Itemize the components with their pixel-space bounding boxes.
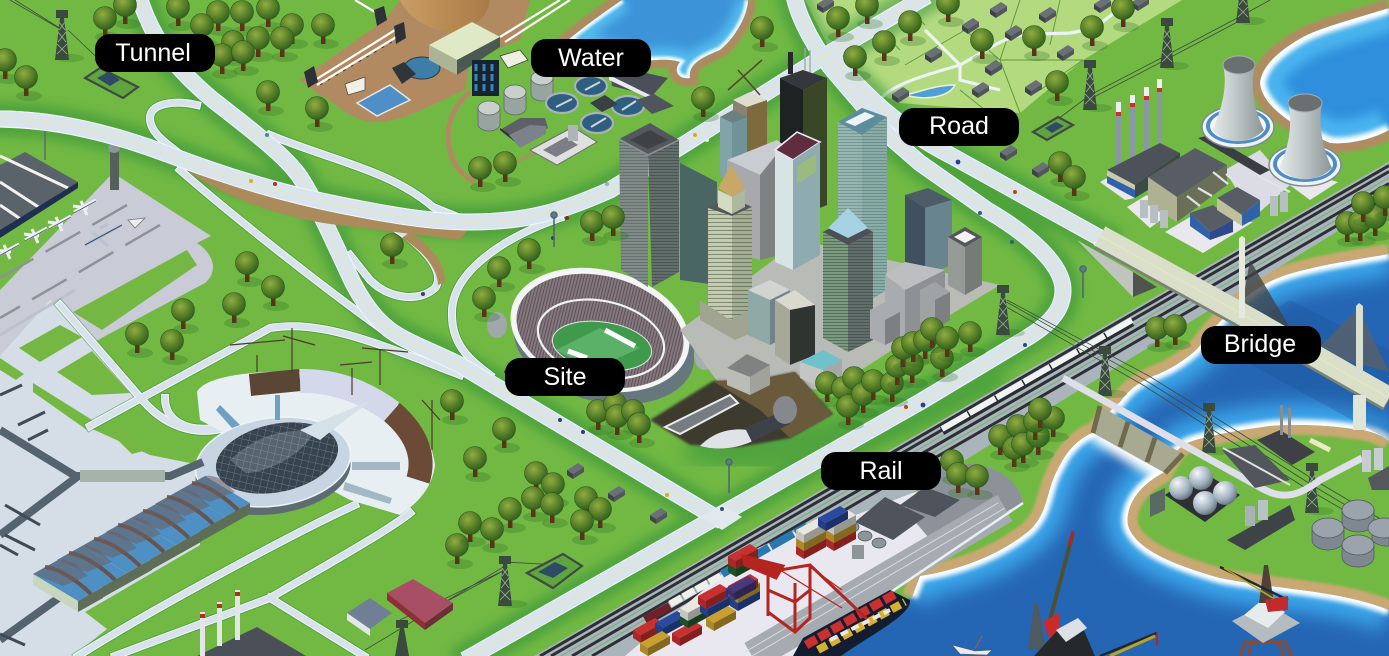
- terminal glass hall: [33, 476, 250, 612]
- clarifiers: [546, 76, 644, 133]
- skyscrapers: [619, 48, 982, 395]
- tunnel cutaway: [650, 372, 833, 448]
- freight train: [645, 526, 807, 620]
- port ground: [625, 464, 1023, 656]
- lake: top right: [1250, 0, 1389, 150]
- oil platform east: [1220, 565, 1300, 656]
- overpass support: [188, 172, 470, 240]
- label: Water: Water: [558, 44, 624, 72]
- station yards: [1100, 157, 1338, 253]
- stadium: [487, 250, 716, 423]
- label: Bridge: Bridge: [1224, 330, 1296, 358]
- airport terminal building: [0, 130, 120, 238]
- grass shading along roads: [0, 0, 1100, 656]
- blue stack tower: [472, 60, 499, 96]
- black tower: [780, 48, 827, 215]
- dark blue tower: [905, 188, 952, 275]
- lake: top centre: [550, 0, 750, 85]
- grey mid tower: [727, 140, 790, 260]
- wings: [352, 462, 400, 470]
- turbine hall: [1148, 148, 1227, 197]
- label: Tunnel: [95, 34, 215, 72]
- right low-rise: [885, 262, 945, 340]
- side cylinders: [487, 312, 507, 338]
- sand pile: [400, 0, 490, 32]
- airport green patches: [0, 325, 147, 454]
- brown tower: [728, 60, 767, 165]
- bridge: [1077, 236, 1389, 430]
- terminal concourses: [0, 385, 203, 645]
- label: Rail: [821, 452, 941, 490]
- annex buildings: [1190, 205, 1233, 232]
- mast: [44, 130, 46, 160]
- oil platform centre: [952, 531, 1157, 656]
- cooling towers: [1202, 56, 1341, 186]
- label: Rail: Rail: [859, 457, 903, 485]
- junction: [700, 505, 742, 530]
- containers: [633, 506, 856, 656]
- pylons: [1239, 236, 1245, 318]
- terminal roof: [190, 395, 400, 524]
- helicopter: [952, 645, 992, 655]
- large grey tower: [619, 123, 679, 287]
- power station: [1100, 79, 1338, 253]
- storage tanks: [478, 71, 553, 131]
- label: Site: Site: [543, 363, 587, 391]
- cable shadows: [1240, 260, 1290, 328]
- sea and river: [841, 243, 1389, 656]
- ship: [793, 590, 910, 656]
- railway corridor: [534, 162, 1389, 656]
- terminal site white ground: [197, 372, 435, 515]
- abutment: [1077, 240, 1133, 297]
- airport apron: [0, 173, 215, 656]
- roads: [0, 0, 1100, 656]
- stone block: [727, 354, 770, 395]
- label: Tunnel: Tunnel: [115, 39, 191, 67]
- mid low-rise: [748, 280, 790, 345]
- water treatment plant: [478, 71, 674, 165]
- grey box tower: [948, 227, 982, 295]
- control tower: [108, 143, 120, 190]
- dark teal building: [680, 163, 717, 285]
- east block: [1368, 466, 1389, 490]
- fuel tanks: [1140, 192, 1288, 228]
- oil tanks: [1312, 500, 1389, 567]
- warehouses: [855, 497, 925, 540]
- small buildings: [500, 118, 548, 142]
- city ground plate: [680, 240, 1000, 390]
- round thickener: [404, 57, 440, 79]
- smokestacks: [1116, 79, 1162, 174]
- process units: [1150, 488, 1165, 517]
- terminal under construction arc: [230, 328, 440, 480]
- label: Site: [505, 358, 625, 396]
- teal roof block: [800, 350, 842, 388]
- teal tower: [720, 110, 747, 190]
- front green tower: [823, 208, 873, 352]
- masts and cell towers: [551, 212, 1086, 493]
- bottom factory with chimneys: [197, 590, 306, 656]
- pale blue tower: [838, 108, 887, 305]
- cream art deco tower: [700, 165, 770, 340]
- cylinders: [835, 516, 886, 548]
- dam and access road: [1063, 378, 1362, 495]
- pond: [357, 85, 410, 116]
- cars: [249, 133, 1098, 511]
- suburb: light green neighbourhood: [805, 0, 1182, 113]
- sheds and stacks: [1257, 430, 1315, 465]
- label: Road: [899, 108, 1019, 146]
- port crane: [743, 556, 867, 633]
- grey apron: [905, 464, 1023, 545]
- label: Water: [531, 39, 651, 77]
- spheres: [1165, 470, 1240, 522]
- mine building: [429, 22, 500, 60]
- pond in suburb: [905, 85, 955, 98]
- steam pipes: [1187, 170, 1295, 206]
- boiler house: [1107, 143, 1180, 185]
- water truck: [500, 50, 528, 68]
- conveyors: [312, 0, 570, 85]
- substations: [85, 68, 1073, 588]
- houses: [567, 0, 1149, 524]
- mine ground and tracks: [300, 0, 570, 182]
- label: Road: Road: [929, 112, 989, 140]
- truck: [345, 77, 365, 95]
- white tower: [775, 132, 820, 270]
- label: Bridge: [1201, 326, 1321, 364]
- small grey cluster: [870, 282, 950, 345]
- refinery island: [1150, 405, 1389, 567]
- passenger train: [942, 320, 1132, 431]
- chemical plant pad: [530, 127, 597, 165]
- red roofed factories: [347, 579, 453, 636]
- airplanes: [0, 200, 145, 259]
